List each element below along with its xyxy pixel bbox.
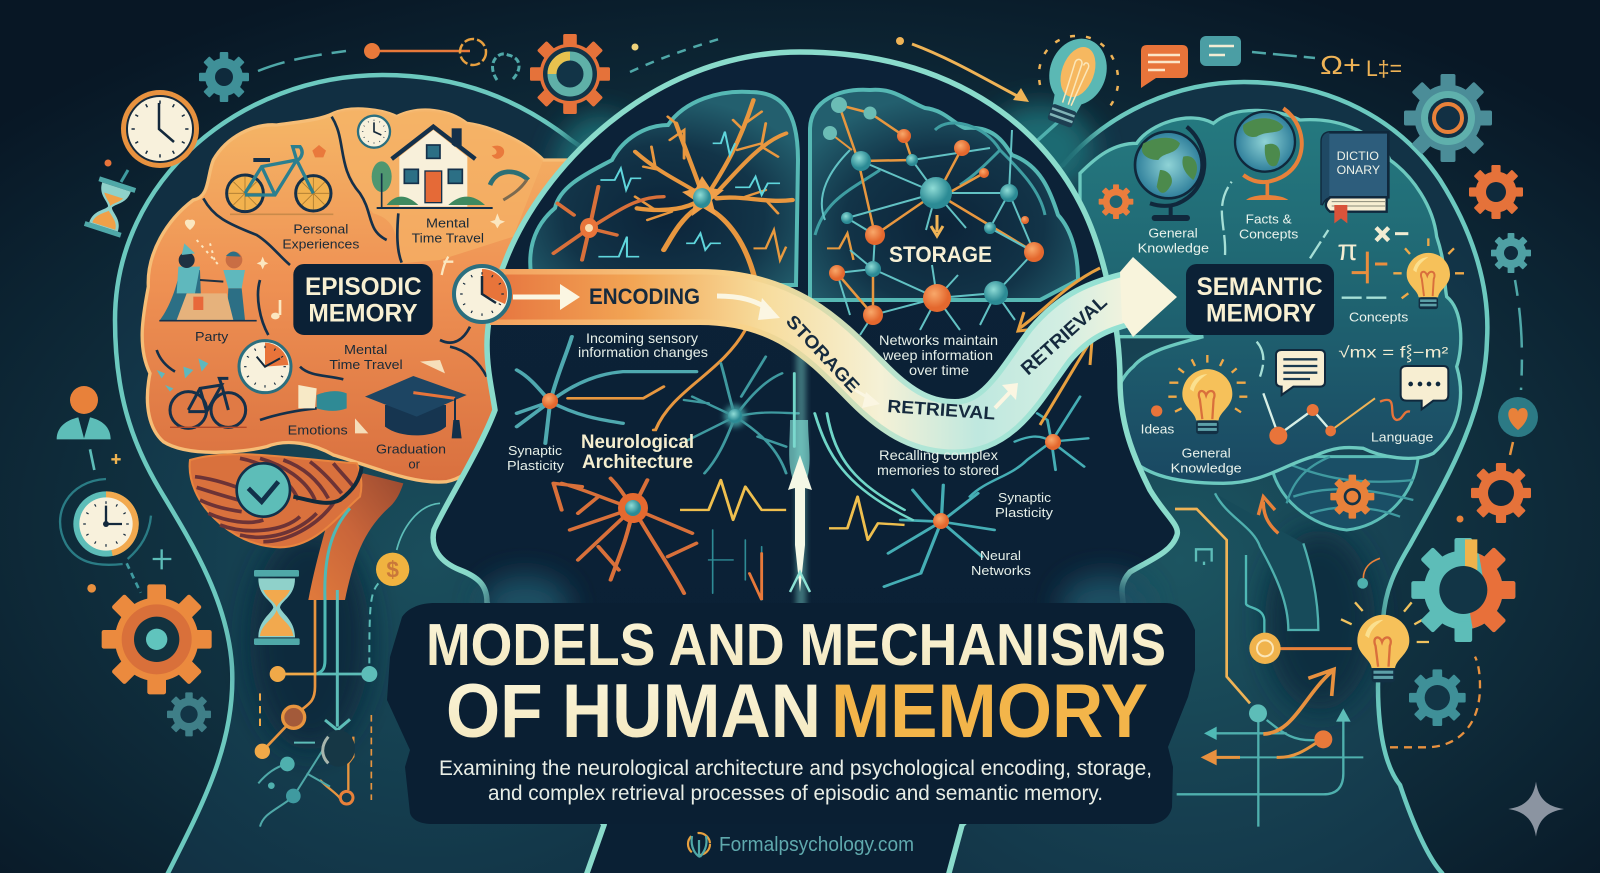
episodic labels: Time Travel: [329, 357, 403, 372]
text: neurological architecture: Neurological: [581, 432, 694, 453]
website: Formalpsychology.com: [719, 834, 914, 856]
network nodes: [823, 97, 1044, 325]
title panel: [387, 603, 1195, 824]
icon: bicycle lower: [170, 378, 247, 428]
dash below heart: [1510, 442, 1513, 455]
check badge: [237, 463, 290, 517]
light bulb: concepts: [1393, 238, 1464, 309]
small clock: [358, 116, 390, 148]
labels: Knowledge: [1171, 460, 1242, 475]
labels: Ideas: [1141, 421, 1175, 436]
top left and side icons: [84, 34, 719, 238]
icon: graduation cap: [365, 376, 467, 438]
connector with dashed ring: [364, 39, 486, 65]
globe: facts and concepts: [1235, 108, 1302, 200]
dictionary book: [1322, 132, 1388, 223]
text: neural networks: Neural: [980, 548, 1021, 563]
gear icon: [1099, 184, 1133, 219]
text: storage description: Networks maintain: [879, 332, 998, 348]
fold lines: [1222, 182, 1390, 377]
text: neural networks: [971, 548, 1032, 578]
small marks: [87, 449, 171, 593]
episodic labels: Emotions: [288, 422, 348, 437]
episodic labels: or: [408, 456, 421, 471]
labels: [1138, 211, 1433, 475]
chart points and arrowheads: [1201, 704, 1351, 765]
subtitle: [439, 757, 1152, 805]
text: encoding description: information changes: [578, 344, 708, 360]
orange dot: [1456, 516, 1464, 522]
speech bubble: [1276, 350, 1325, 395]
footer logo: [688, 833, 914, 857]
left head silhouette: [115, 75, 800, 873]
left cerebellum, brainstem and lower icons: [57, 386, 440, 827]
neuron bodies: [542, 393, 1061, 529]
chin glows: [480, 575, 1150, 635]
panel: episodic memory brain: [142, 109, 587, 482]
brainstem outline: [1215, 493, 1318, 630]
subtitle: and complex retrieval processes of episodic and semantic memory.: [488, 782, 1103, 805]
text: synaptic plasticity right: Synaptic: [998, 490, 1052, 505]
gear teal top: [199, 52, 249, 102]
clock at arrow start: [454, 266, 510, 322]
dots and dashes top center: [630, 39, 719, 72]
episodic memory label: MEMORY: [308, 300, 418, 328]
bulb lower right: [1341, 558, 1429, 682]
neuron: small orange: [553, 187, 664, 260]
arrow: encoding storage retrieval flow: [490, 257, 1177, 427]
right head silhouette: [800, 82, 1487, 873]
semantic memory label: SEMANTIC: [1197, 273, 1323, 301]
teal gear right: [1404, 74, 1492, 162]
text: storage description: weep information: [882, 347, 993, 363]
episodic labels: Party: [195, 329, 229, 344]
cerebellum: [190, 454, 362, 547]
orange gear: [1330, 475, 1374, 519]
left lobe: [530, 92, 798, 285]
teal glows: [250, 105, 1375, 750]
icon: house: [372, 127, 493, 208]
math symbols: √mx = f⸾−m²: [1338, 345, 1448, 363]
arrow head: [1120, 257, 1177, 337]
orange gear right: [1469, 165, 1523, 219]
episodic labels: Mental: [426, 216, 469, 231]
labels: Concepts: [1239, 226, 1299, 241]
text: synaptic plasticity left: Synaptic: [508, 443, 563, 458]
lower neurons and signals: [517, 330, 1092, 610]
text: synaptic plasticity right: Plasticity: [995, 505, 1054, 520]
inner lobe outlines: [815, 123, 1045, 235]
text: retrieval description: [877, 447, 999, 478]
dictionary book: DICTIO: [1337, 149, 1379, 163]
labels: Knowledge: [1138, 240, 1209, 255]
clock icon lower left: [60, 479, 151, 565]
network edges: [830, 105, 1034, 315]
title: MODELS AND MECHANISMS: [426, 612, 1166, 678]
center text labels: [507, 330, 1054, 578]
small teal gear right: [1491, 233, 1531, 273]
text: neurological architecture: Architecture: [582, 452, 693, 473]
math glyphs: L‡=: [1366, 56, 1402, 81]
labels: Facts &: [1246, 211, 1292, 226]
yellow circuit: [1175, 509, 1250, 703]
center head: [433, 52, 1177, 873]
title: MEMORY: [831, 669, 1148, 754]
brain outline: [1080, 110, 1461, 483]
math glyphs: Ω+: [1320, 50, 1361, 80]
glowing central spine: [788, 330, 812, 610]
text: synaptic plasticity left: Plasticity: [507, 458, 565, 473]
retrieval label on flow: RETRIEVAL: [887, 396, 996, 424]
labels: General: [1148, 226, 1198, 241]
person icon: [57, 386, 111, 439]
speech bubble: language: [1401, 366, 1448, 409]
teal gear lower: [1409, 669, 1466, 726]
episodic labels: Graduation: [376, 441, 446, 456]
logo icon: [688, 833, 710, 857]
hourglass top left: [84, 176, 136, 238]
yellow dot and arrow: [896, 37, 1029, 102]
hourglass: [254, 570, 300, 645]
panel: central brain, left lobe neurons: [530, 90, 1100, 335]
node to bulb: [1249, 633, 1352, 664]
text: neural networks: Networks: [971, 563, 1032, 578]
teal speech bubble: [1200, 36, 1241, 66]
labels: Language: [1371, 430, 1433, 445]
teal circuit: [1246, 555, 1264, 635]
lighter upper lobe: [333, 109, 543, 263]
right lobe: [810, 90, 1078, 300]
text: encoding description: [578, 330, 708, 360]
episodic labels: [195, 216, 484, 471]
orange speech bubble: [1141, 45, 1188, 88]
title: OF HUMAN: [446, 669, 821, 754]
episodic labels: Personal: [293, 221, 348, 236]
small marker icon: [1196, 549, 1212, 565]
small down arrow: [931, 215, 943, 236]
signal nodes: [255, 666, 377, 804]
globe: general knowledge: [1135, 127, 1204, 221]
large orange gear: [102, 584, 212, 694]
semantic memory label: MEMORY: [1206, 300, 1316, 328]
text: storage description: [879, 332, 998, 378]
labels: Concepts: [1349, 310, 1409, 325]
top right icons: [896, 30, 1538, 523]
flow arrows: [513, 296, 1012, 408]
heart badge: [1498, 397, 1538, 437]
text: retrieval description: memories to stored: [877, 462, 999, 478]
storage label on flow: STORAGE: [782, 311, 864, 396]
orange gear top: [530, 34, 610, 114]
stem signal lines: [258, 503, 440, 827]
text: synaptic plasticity right: [995, 490, 1054, 520]
math glyphs: [1320, 50, 1402, 81]
signal traces: [598, 132, 780, 257]
fold lines: [157, 117, 487, 420]
text: synaptic plasticity left: [507, 443, 565, 473]
marks by hourglass: [104, 160, 128, 182]
text: neurological architecture: [581, 432, 694, 473]
math symbols: π: [1337, 234, 1358, 267]
small teal gear: [167, 692, 211, 736]
dictionary book: ONARY: [1337, 163, 1380, 177]
dollar coin: $: [386, 557, 399, 583]
text: storage description: over time: [909, 362, 969, 378]
brainstem: [308, 473, 403, 600]
neuron: orange upper: [635, 100, 792, 277]
clock in lower lobe: [239, 341, 291, 393]
orange gear lower right: [1471, 463, 1531, 523]
labels: General: [1182, 445, 1231, 460]
episodic memory label: [293, 264, 433, 335]
semantic memory label: [1186, 264, 1334, 335]
light bulb: ideas: [1151, 355, 1247, 434]
large clock top left: [121, 90, 199, 168]
math symbols: [1337, 228, 1448, 363]
teal dashed arc: [493, 54, 519, 80]
subtitle: Examining the neurological architecture and psychological encoding, storage,: [439, 757, 1152, 780]
encoding label: ENCODING: [589, 284, 700, 309]
orange dashed link: [1390, 657, 1480, 747]
yellow trace: [753, 230, 854, 260]
large two-tone gear: [1411, 538, 1515, 642]
neuron branches: [517, 330, 1088, 600]
orange arrow lower right: [1040, 340, 1092, 425]
sparkle star: [1508, 782, 1564, 837]
right lower diagram: [1175, 493, 1564, 837]
brain outline: [142, 109, 587, 482]
storage heading: STORAGE: [889, 242, 992, 267]
dashed line top: [258, 51, 346, 71]
orange arrow to lower left: [1018, 268, 1100, 331]
orange arrow in stem: [1258, 497, 1278, 533]
yellow ECG traces: [680, 480, 905, 540]
icon: party people: [159, 243, 257, 321]
dash link: [1252, 52, 1315, 58]
icon: bicycle upper: [227, 147, 333, 214]
dollar coin: [376, 553, 409, 586]
text: retrieval description: Recalling complex: [879, 447, 998, 463]
chart axes: [1177, 669, 1363, 827]
text: encoding description: Incoming sensory: [586, 330, 698, 346]
cerebellum: [1270, 457, 1418, 530]
episodic labels: Experiences: [282, 236, 360, 251]
episodic memory label: EPISODIC: [305, 273, 422, 301]
decorations: [157, 145, 528, 433]
dashed vertical right: [1515, 280, 1522, 390]
panel background: [387, 603, 1195, 824]
title: [426, 612, 1166, 754]
episodic labels: Time Travel: [412, 231, 484, 246]
panel: semantic memory brain: [1080, 108, 1464, 530]
retrieval vertical label: RETRIEVAL: [1017, 292, 1112, 380]
light bulb top: [1033, 30, 1118, 140]
line graph: [1263, 393, 1410, 445]
episodic labels: Mental: [344, 342, 387, 357]
